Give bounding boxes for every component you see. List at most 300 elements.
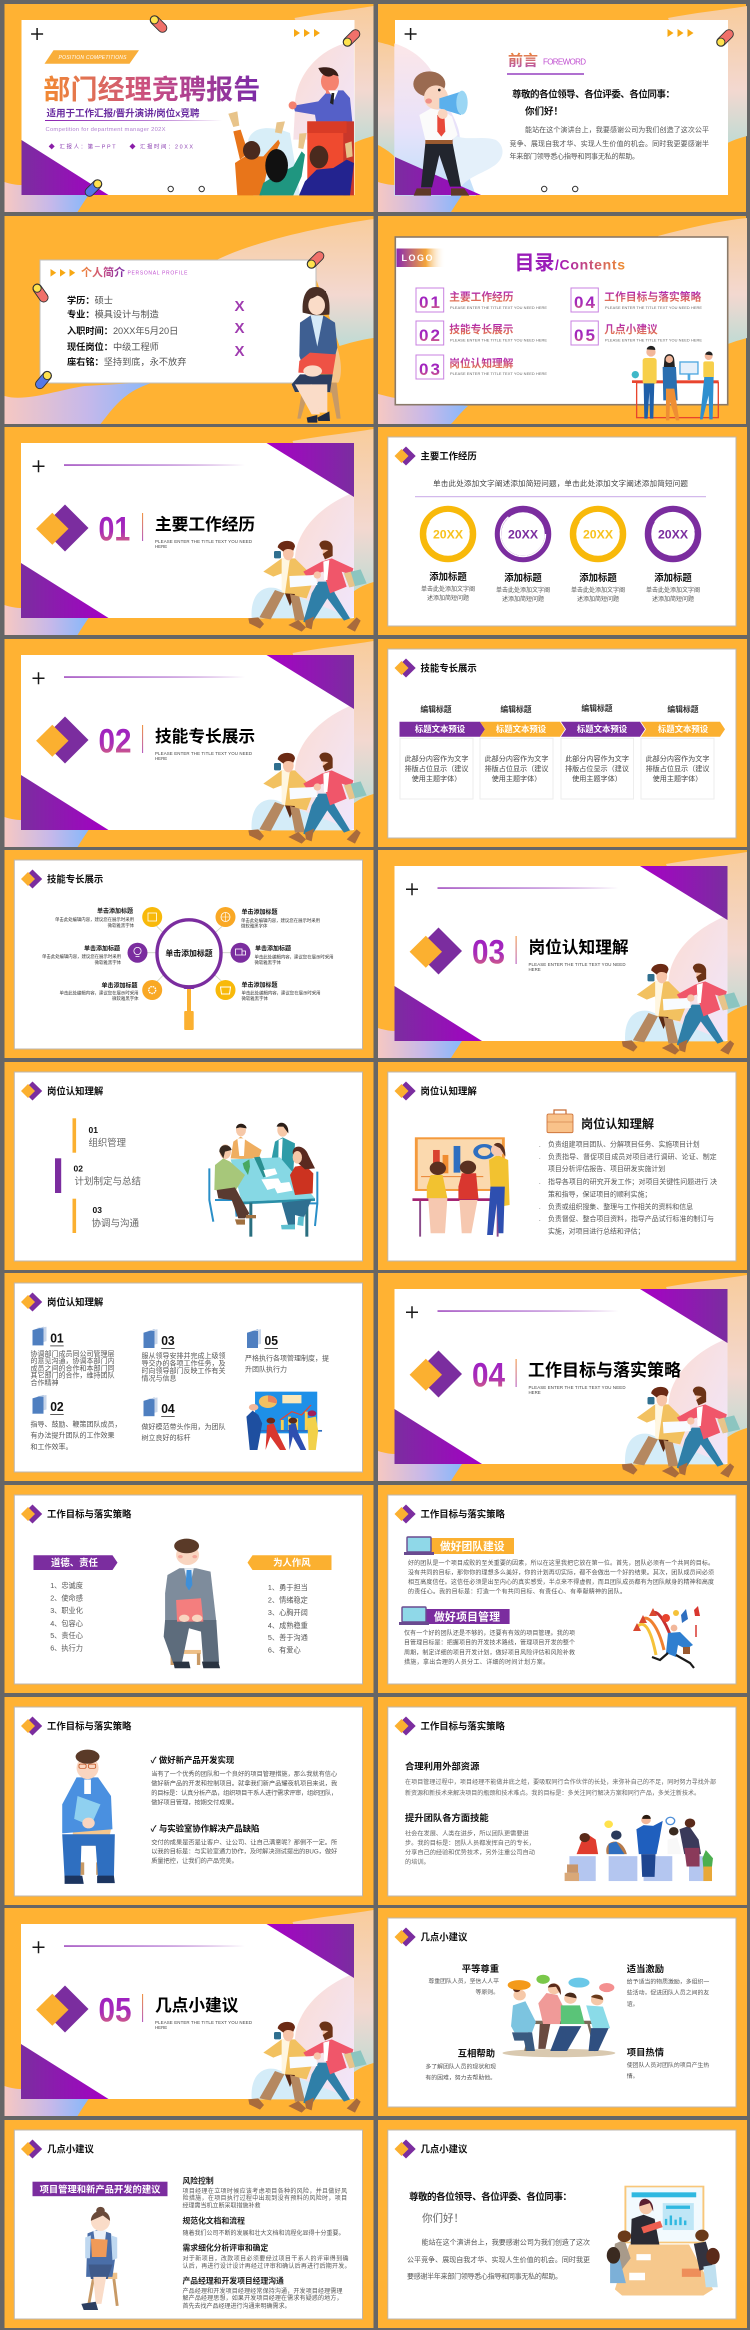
card [4,1697,374,1905]
ring dots [168,186,204,192]
advice 4: 首先去找产品经理进行沟通来明确需求。 [182,2302,291,2310]
item 03: 协调与沟通 [92,1218,140,1230]
column labels: 编辑标题 [420,704,452,714]
right labels: 微软雅黑字体 [241,922,268,930]
item 01: 协调部门成员同公司管理层 [30,1349,114,1358]
paragraph 2 [151,1838,337,1865]
icon: document circle [142,907,162,927]
pink blue corner wave [378,182,462,212]
duties list: 策和指导，保证项目的顺利实施； [548,1190,651,1198]
ring 1: 20XX [433,528,464,542]
item 05: 升团队执行力 [245,1365,287,1374]
paragraph: project: 目管理目标是：把握项目的开发技术路线，管理项目开发的整个 [404,1639,575,1647]
peach corner wave [658,218,747,346]
pill: top [148,14,169,34]
column texts: 单击此处添加文字阐 [421,585,475,593]
subtitle rule [45,120,222,121]
column texts [421,571,700,603]
column box 4: 使用主题字体） [653,774,702,783]
icon: arrows [668,29,694,37]
icon: gear circle [142,980,162,1000]
arrow 3: 标题文本预设 [577,724,628,734]
subheading 2: 提升团队各方面技能 [405,1812,489,1823]
suggestion: motivate: 给予适当的物质激励，多组织一 [627,1978,709,1986]
contents item 03 [416,355,547,379]
paragraph 2: 的培训。 [405,1858,430,1866]
item 03: 03 [92,1205,102,1215]
item 03 [142,1329,226,1382]
heading: 几点小建议 [420,1932,468,1942]
heading: 工作目标与落实策略 [420,1720,506,1732]
column box 4: 此部分内容作为文字 [646,754,709,763]
duties heading: 岗位认知理解 [581,1116,654,1131]
icon: logo mark [394,658,416,678]
panel: personal profile slide [4,216,374,424]
ring 3: 20XX [583,528,614,542]
column texts: 述添加简短问题 [577,595,619,603]
heading: 岗位认知理解 [47,1086,104,1096]
section background [4,427,374,635]
suggestion: respect: 尊重团队人员，坚信人人平 [428,1977,499,1985]
left list: 1、忠诚度 [50,1581,83,1590]
advice 2: 随着我们公司不断的发展和壮大文档和流程化显得十分重要。 [182,2229,344,2237]
panel: section 03 [378,850,747,1058]
suggestion: passion [627,2046,709,2080]
item 01: 成员之间的合作和本部门同 [30,1364,114,1372]
item 03: 03 [161,1333,175,1348]
arrow 1 [400,722,485,737]
panel: section 02 [4,639,374,847]
column box 1: 使用主题字体） [412,774,461,783]
column box 3: 使用主题字体） [572,774,622,783]
right labels: 单击此处编辑内容，建议您在展示时采用 [242,990,321,996]
panel: role list [4,1062,374,1270]
column labels: 编辑标题 [500,704,532,714]
column labels [420,703,699,714]
icon: logo mark [394,1928,416,1946]
item 04: 树立良好的标杆 [142,1433,190,1442]
bullet marks: . [539,1180,541,1186]
panel: cover slide [4,4,374,212]
panel: contents slide [378,216,747,424]
column texts: 单击此处添加文字阐 [571,586,625,594]
contents heading: /Contents [555,256,625,272]
column texts: 添加标题 [579,572,617,583]
duties list: 负责组建项目团队、分解项目任务、实施项目计划 [548,1140,700,1148]
subheading 1: 合理利用外部资源 [405,1760,480,1772]
panel: external resources [378,1697,747,1905]
paragraph: 年来部门领导悉心指导和同事无私的帮助。 [510,152,639,160]
card [378,1908,747,2116]
card [4,1273,374,1481]
paragraph: team: 没有共同的目标，那你你的理想多么美好，你的计划再切实际，都不会做出一个好的结果。其次，团队成员间必须 [408,1568,714,1576]
profile lines: 座右铭：坚持到底，永不放弃 [67,356,186,367]
icon: logo mark [394,446,416,466]
heading: 工作目标与落实策略 [47,1508,132,1520]
column texts: 添加标题 [654,572,692,583]
icon: arrows [294,29,320,37]
right banner [248,1555,332,1570]
icon: plus [405,28,417,40]
right labels: 单击添加标题 [255,945,291,953]
magnifier [157,920,221,1030]
contents item 02 [416,321,547,345]
rule [415,496,706,497]
connector lines [146,926,230,982]
duties list: 负责指导、督促项目成员对项目进行调研、论证、制定 [548,1152,717,1161]
item 01 [30,1327,114,1387]
peach corner wave [216,219,374,346]
subheading 2: ✓ 与实验室协作解决产品缺陷 [150,1823,259,1833]
right list: 1、勇于担当 [268,1583,308,1592]
right banner: 为人作风 [273,1557,311,1568]
left labels: 单击添加标题 [84,945,120,953]
section subtitle: HERE [528,1390,541,1395]
section subtitle [528,1385,626,1395]
paragraph 1 [405,1778,716,1797]
paragraph: 竞争、展现自我才华、实现人生价值的机会。同时我更要感谢半 [510,139,709,148]
contents item 04: 工作目标与落实策略 [604,290,702,304]
bullet marks: . [539,1205,541,1211]
heading: 技能专长展示 [420,662,477,674]
section subtitle: PLEASE ENTER THE TITLE TEXT YOU NEED [155,2020,252,2025]
duties list: 实施，对项目进行总结和评估； [548,1226,644,1236]
illustration: meeting room [607,2187,720,2296]
contents heading: 目录 [514,252,554,274]
paragraph 1: 当有了一个优秀的团队和一个良好的项目管理措施，那么我就有信心 [151,1770,337,1778]
left labels: 单击添加标题 [101,982,138,990]
panel: ethics and style [4,1485,374,1693]
suggestion: passion: 使团队人员对团队的项目产生热 [627,2061,709,2069]
contents item 04: PLEASE ENTER THE TITLE TEXT YOU NEED HERE [605,305,702,310]
peach corner wave [668,6,747,146]
paragraph 1: 新资源和新技术来解决项目的瓶颈和技术难点。我的目标是：多关注同行解决方案和同行产品，多关注新技术。 [405,1789,700,1797]
panel: closing greeting [378,2120,747,2328]
paragraph: project [404,1629,575,1666]
item 03: 服从领导安排并完成上级领 [142,1351,226,1360]
suggestion: help: 有的困难，努力去帮助他。 [425,2074,496,2082]
contents item 05: PLEASE ENTER THE TITLE TEXT YOU NEED HERE [605,338,702,342]
illustration: team discussion [502,1975,615,2057]
item 02: 有办法提升团队的工作效果 [30,1430,114,1440]
title: 部门经理竞聘报告 [43,75,260,105]
right list: 6、有爱心 [268,1646,301,1654]
illustration: team meeting [209,1123,318,1237]
section subtitle: HERE [155,2025,167,2030]
section subtitle [155,751,252,761]
advice 1: 险措施，在项目执行过程中出现到没有预料的风险时，项目 [182,2194,347,2202]
illustration: seated man in blue [62,1750,115,1884]
suggestion: passion: 项目热情 [627,2046,664,2058]
column box 4 [641,738,714,799]
illustration: office team [565,1815,713,1881]
paragraph: 能站在这个演讲台上，我要感谢公司为我们创造了这次 [422,2237,590,2246]
column box 2: 使用主题字体） [492,774,541,783]
ring 3 [573,509,623,559]
left list: 4、包容心 [50,1619,83,1628]
arrow 2: 标题文本预设 [496,724,547,734]
contents item 01: 主要工作经历 [449,290,514,304]
contents item 04 [571,288,702,312]
icon: bulb circle [128,943,148,963]
arrow 4 [641,722,725,737]
icon: logo mark [21,1082,42,1100]
arrow 3 [561,722,645,737]
advice 1 [182,2176,347,2210]
item 02 [30,1395,122,1451]
bullet marks: . [539,1155,541,1161]
panel: project management advice [4,2120,374,2328]
reporter info: 汇报时间：20XX [140,142,193,150]
paragraph 2: 交付的成果是否是让客户、让公司、让自己满意呢？那倒不一定。所 [151,1838,337,1846]
contents item 01: 01 [419,293,440,312]
contents item 05: 几点小建议 [604,323,658,336]
X placeholders: X [234,298,245,315]
card [4,850,374,1058]
suggestion: respect: 等原则。 [475,1988,499,1996]
contents item 02: PLEASE ENTER THE TITLE TEXT YOU NEED HERE [450,338,547,342]
paragraph: team: 好的团队是一个项目成败的至关重要的因素，所以在这里我把它放在第一位。首先，团队必须有一个共同的目标。 [408,1559,714,1567]
pill: right [341,28,362,48]
panel: new product development [4,1697,374,1905]
section subtitle: HERE [155,544,167,549]
left labels: 单击此处编辑内容，建议您在展示时采用 [42,953,121,960]
position banner [44,50,139,64]
right list: 4、成熟稳重 [268,1621,308,1630]
item 03 [72,1199,140,1233]
paragraph 2: 步。我的目标是：团队人员都发挥自己的专长， [405,1839,535,1847]
item 01: 合作精神 [30,1378,58,1387]
banner: project management [399,1607,510,1625]
advice 1: 经理需当机立断采取措施补救 [182,2202,261,2210]
heading english: PERSONAL PROFILE [128,270,188,276]
logo tab: LOGO [402,253,432,263]
profile lines [67,294,186,367]
column box 1: 排版占位显示（建议 [405,764,468,773]
item 02: 02 [74,1164,83,1174]
advice 1: 项目经理在立项时候应该考虑项目各种的风险，并且做好风 [182,2187,347,2195]
section title: 工作目标与落实策略 [528,1360,681,1380]
ring 2: 20XX [508,528,539,542]
illustration: presentation board [412,1138,510,1237]
section subtitle [155,539,252,549]
column texts: 述添加简短问题 [427,594,469,602]
greeting: 尊敬的各位领导、各位评委、各位同事： [409,2191,572,2203]
section subtitle: HERE [528,967,541,972]
paragraph 1 [151,1770,337,1807]
icon: logo mark [21,1292,42,1312]
panel: four suggestions [378,1908,747,2116]
item 05: 严格执行各项管理制度，提 [245,1354,329,1363]
column texts: 述添加简短问题 [652,595,694,603]
section number: 04 [472,1356,505,1394]
section subtitle: PLEASE ENTER THE TITLE TEXT YOU NEED [155,539,252,544]
purple triangle [395,157,481,195]
icon: shop circle [216,980,236,1000]
contents item 05: 05 [574,326,595,345]
duties list: 负责或组织搜集、整理与工作相关的资料和信息 [548,1202,693,1211]
item 04 [142,1398,226,1442]
suggestion: respect [428,1963,499,1996]
advice 3: 对于新项目，改款项目必须要经过项目干系人的评审得到确 [182,2254,348,2262]
arrow 2 [480,722,565,737]
pill: top [305,250,326,270]
section background [378,1273,747,1481]
contents item 01: PLEASE ENTER THE TITLE TEXT YOU NEED HERE [450,305,547,310]
right labels: 微软雅黑字体 [254,959,281,966]
X placeholders: X [234,320,245,337]
item 03: 导交办的各项工作任务，及 [142,1359,226,1368]
suggestion: motivate: 些活动，促进团队人员之间的友 [627,1989,709,1997]
item 02: 和工作效率。 [30,1442,72,1451]
bullet marks [539,1143,541,1223]
contents item 03: 岗位认知理解 [449,357,514,370]
english subtitle: Competition for department manager 202X [46,127,166,133]
heading: 工作目标与落实策略 [47,1720,132,1732]
paragraph 1: 的目标是：认真分析产品，组织项目干系人进行需求评审，组织团队， [151,1789,337,1797]
advice 4: 产品经理和开发项目经理沟通 [182,2275,284,2285]
suggestion: help: 互相帮助 [458,2048,495,2058]
paragraph [407,2237,590,2281]
advice 4: 解产品经理思想，如果开发项目经理在需求有疑惑的地方， [182,2294,342,2302]
paragraph: 公平竞争、展现自我才华、实现人生价值的机会。同时我更 [407,2255,590,2264]
pill: right [715,28,735,48]
subtitle: 适用于工作汇报/晋升演讲/岗位x竞聘 [46,108,200,120]
heading: 工作目标与落实策略 [420,1508,506,1520]
section subtitle: PLEASE ENTER THE TITLE TEXT YOU NEED [155,751,252,756]
heading: 岗位认知理解 [420,1086,477,1096]
ring 4: 20XX [658,528,689,542]
left list: 2、使命感 [50,1594,83,1602]
position banner: POSITION COMPETITIONS [58,55,127,61]
section number: 02 [98,722,132,760]
left labels: 微软雅黑字体 [112,995,139,1002]
left list: 5、责任心 [50,1631,83,1640]
section subtitle [528,962,626,972]
ring dots [542,186,578,192]
icon: logo mark [21,1716,42,1736]
section title: 技能专长展示 [155,727,255,746]
paragraph 2: 分享自己的经验和优势技术，另外注重公司自动 [405,1848,535,1856]
subheading 1: ✓ 做好新产品开发实现 [150,1755,235,1765]
left peach wave [378,42,395,157]
right list: 3、心胸开阔 [268,1608,308,1617]
item 05 [245,1329,329,1374]
suggestion: motivate: 谊。 [627,2000,639,2008]
column box 2: 排版占位显示（建议 [485,764,548,773]
X placeholders [234,298,245,360]
pink blue corner wave [378,394,468,424]
item 03: 时向领导部门反映工作有关 [142,1366,226,1375]
paragraph 2: 质量把控，让我们的产品完美。 [151,1857,238,1865]
panel: magnifier diagram [4,850,374,1058]
icon: logo mark [394,1716,416,1736]
paragraph: 要感谢半年来部门领导悉心指导和同事无私的帮助。 [407,2272,562,2281]
bullet marks: . [539,1217,541,1223]
suggestion: motivate [627,1963,709,2008]
section title: 主要工作经历 [155,515,255,534]
paragraph 1: 做好新产品的开发和控制项目。就拿我们新产品耀夜机项目来说，我 [151,1780,337,1788]
pink blue corner wave [4,182,88,212]
advice 3: 认后，再进行设计设计再经过评审和确认后再进行后期开发。 [182,2262,350,2270]
heading: 主要工作经历 [420,450,477,462]
left labels: 单击添加标题 [97,907,133,915]
icon: logo mark [394,1082,416,1100]
column texts: 单击此处添加文字阐 [496,586,550,594]
profile lines: 专业：模具设计与制造 [67,308,159,320]
item 01: 的意见沟通，协调本部门内 [30,1356,114,1365]
section background [378,850,747,1058]
item 05: 05 [264,1333,278,1348]
card [378,1697,747,1905]
advice 2: 规范化文档和流程 [182,2215,245,2225]
right list [268,1583,308,1654]
profile card [40,260,316,383]
illustration: boy background [394,43,503,196]
advice 4 [182,2275,342,2310]
pill: bottom [83,178,104,198]
profile lines: 入职时间：20XX年5月20日 [67,325,178,336]
left labels: 单击此处编辑内容，建议您在展示时采用 [55,916,134,923]
duties list: 项目分析评估报告、项目研发实施计划 [548,1164,665,1173]
contents heading [514,252,625,274]
illustration: runner and arrows [633,1606,700,1668]
card [378,1062,747,1270]
card [4,1062,374,1270]
greeting: 尊敬的各位领导、各位评委、各位同事： [512,88,675,100]
panel: foreword slide [378,4,747,212]
icon: logo mark [394,2140,416,2158]
column texts: 述添加简短问题 [502,595,544,603]
item 02 [55,1158,141,1193]
contents item 02: 02 [419,326,440,345]
heading rule [507,73,584,75]
X placeholders: X [234,343,245,360]
heading english: FOREWORD [543,58,586,66]
reporter info: 汇报人：第一PPT [60,142,116,150]
card [378,2120,747,2328]
suggestion: passion: 情。 [627,2072,639,2080]
column texts: 单击此处添加文字阐 [646,586,700,594]
profile heading: 个人简介 [81,265,125,279]
item 04: 做好模范带头作用，为团队 [142,1422,226,1431]
left banner: 道德、责任 [51,1557,99,1568]
column box 3: 此部分内容作为文字 [565,754,629,763]
magnifier: 单击添加标题 [165,948,213,958]
section subtitle: PLEASE ENTER THE TITLE TEXT YOU NEED [528,962,626,967]
icon: logo mark [21,1504,42,1524]
card [378,1485,747,1693]
duties list [548,1140,717,1236]
panel: five duties [4,1273,374,1481]
banner: team building: 做好团队建设 [440,1539,505,1553]
section subtitle: PLEASE ENTER THE TITLE TEXT YOU NEED [528,1385,626,1390]
bullet marks: . [539,1143,541,1149]
column box 1: 此部分内容作为文字 [405,754,468,763]
item 02: 02 [50,1399,64,1414]
paragraph: team: 的责任心。我的目标是：打造一个有共同目标、有责任心、有奉献精神的团队。 [408,1588,626,1596]
illustration: team at desk [632,346,719,420]
illustration: chart board team [246,1392,322,1450]
right labels: 单击此处编辑内容，建议您在展示时采用 [254,954,334,960]
hello: 你们好！ [525,106,563,118]
left labels: 微软雅黑字体 [95,959,122,966]
contents item 01 [416,288,547,312]
contents item 03: 03 [419,360,440,379]
left list: 3、职业化 [50,1606,83,1615]
suggestion: help [425,2048,496,2082]
logo tab [396,248,446,267]
